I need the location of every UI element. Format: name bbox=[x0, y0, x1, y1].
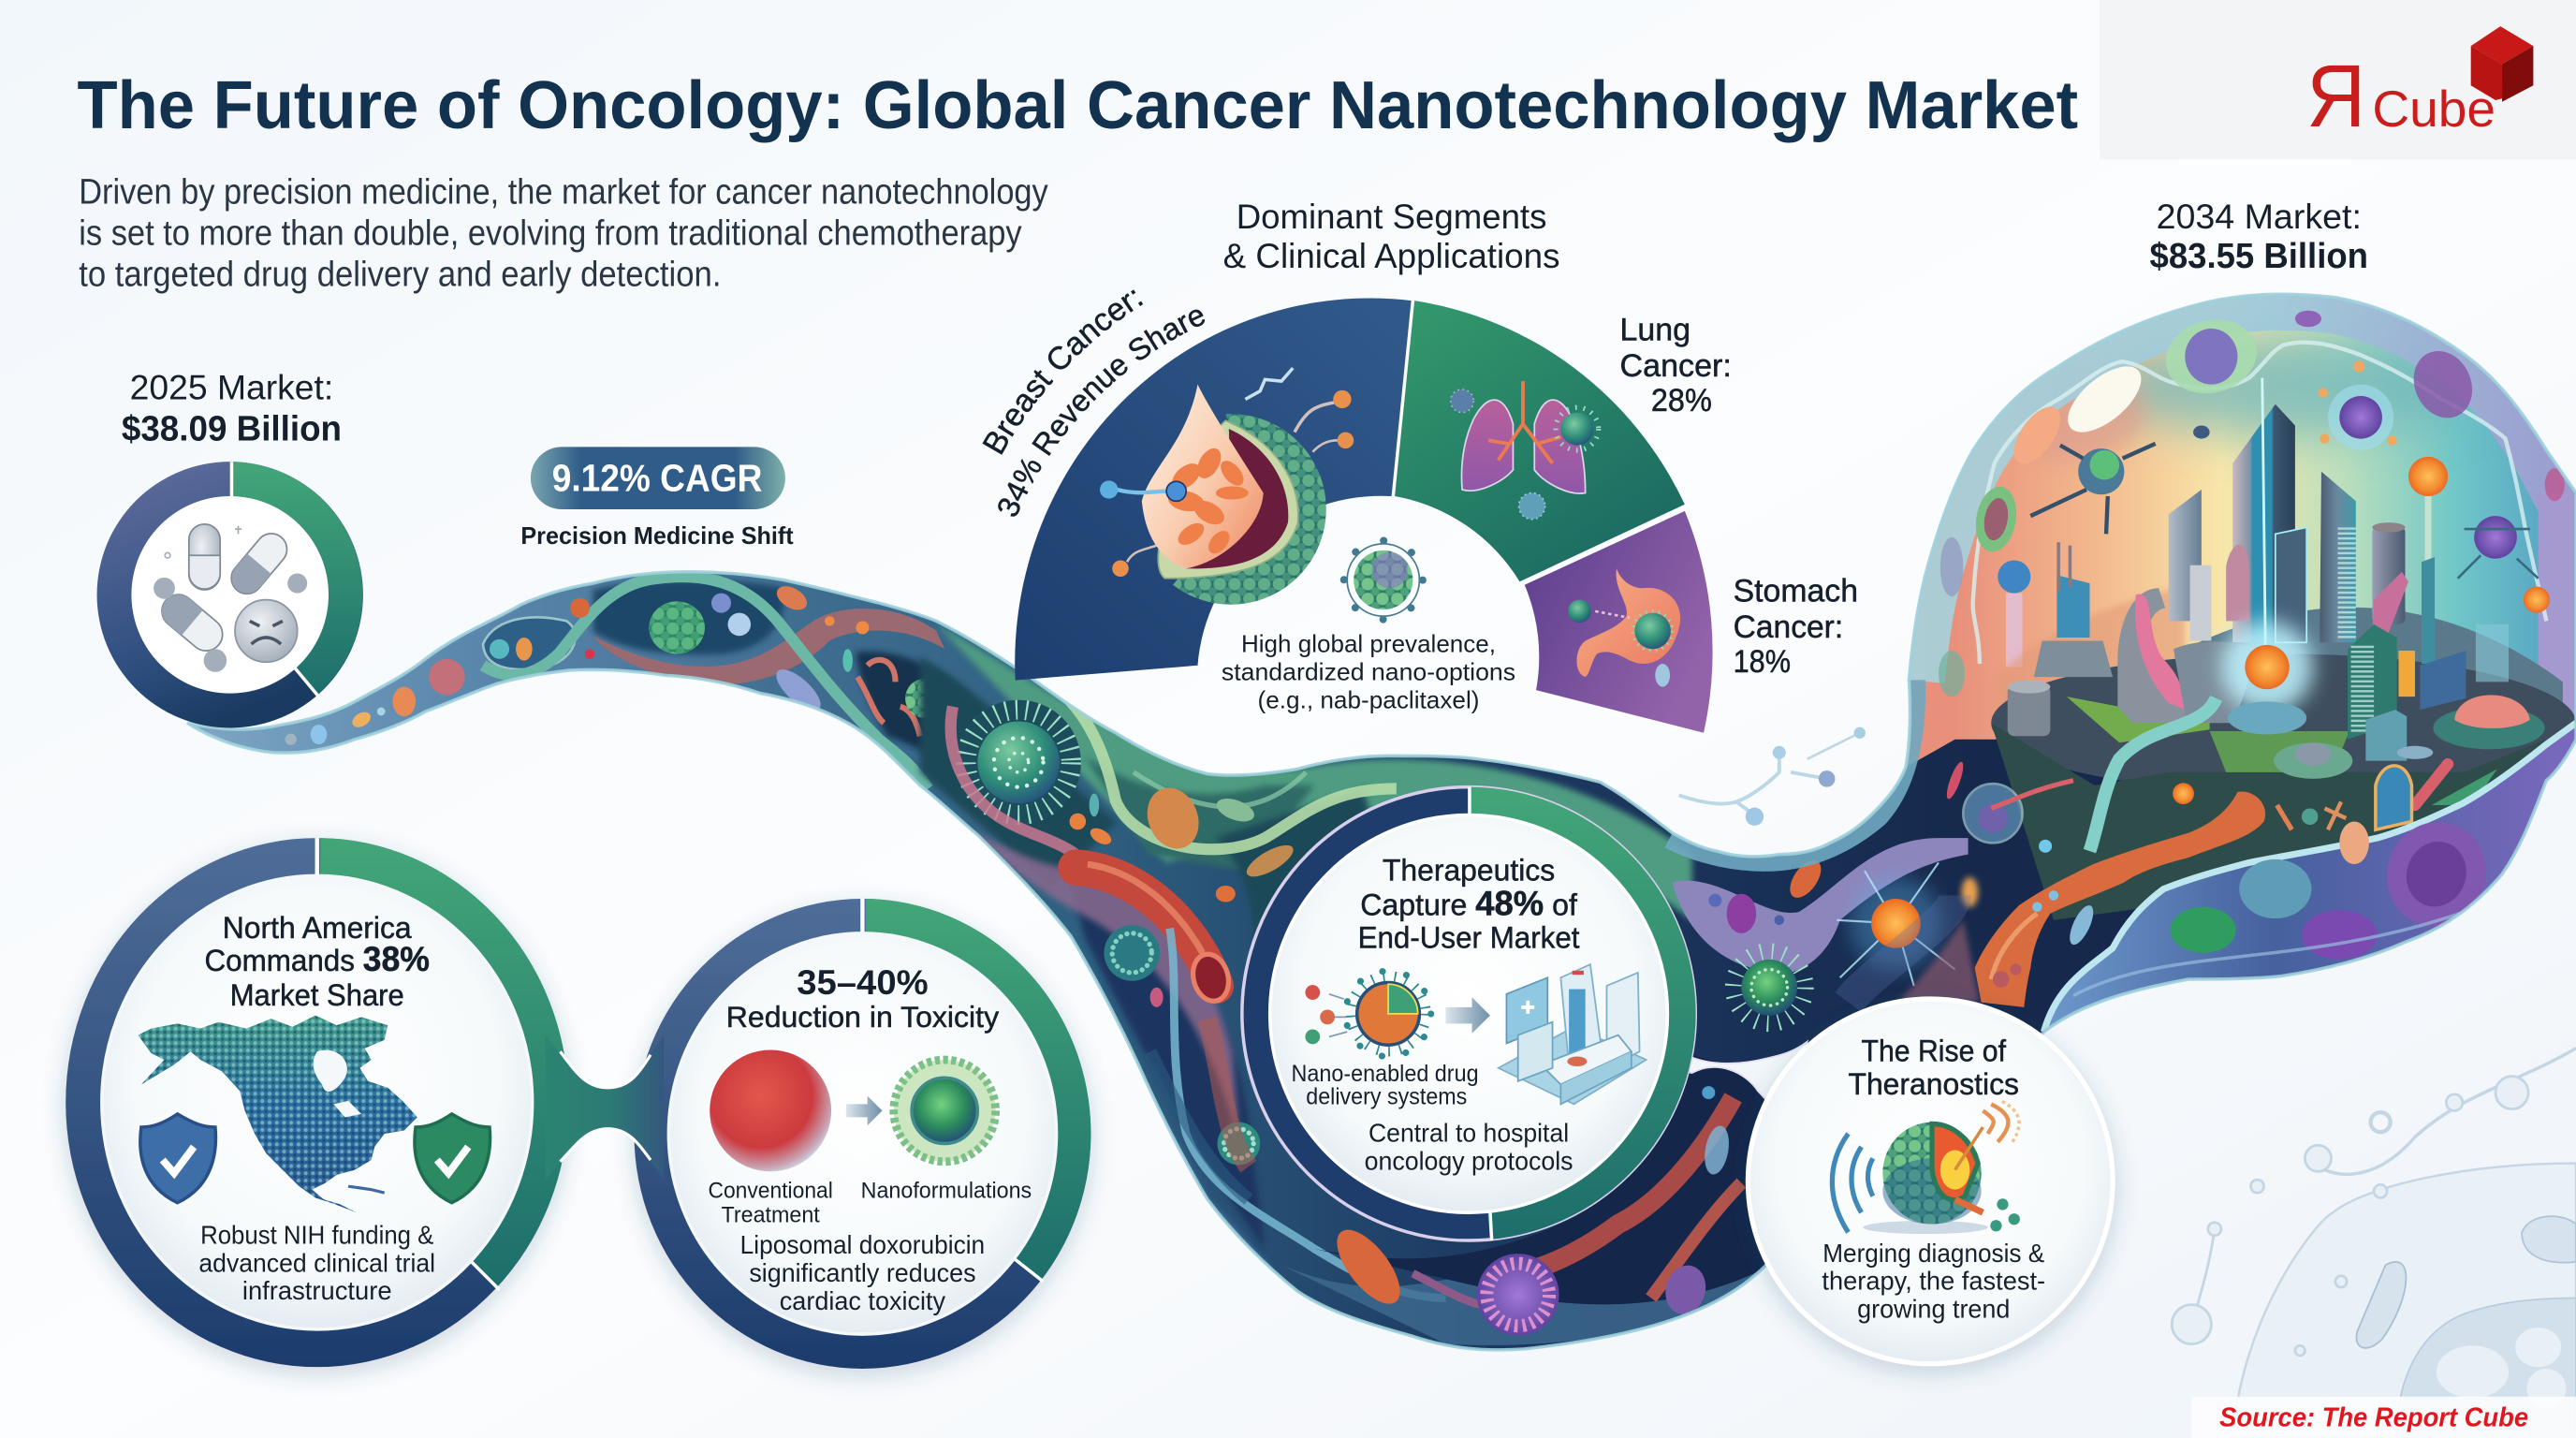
icon: nano drug particle bbox=[1305, 971, 1431, 1056]
icon: hospital room bbox=[1499, 964, 1647, 1104]
icon: arrow bbox=[846, 1096, 882, 1125]
label: stomach cancer: 18% bbox=[1734, 644, 1791, 680]
central description: standardized nano-options bbox=[1222, 658, 1515, 686]
heading: Therapeutics bbox=[1383, 854, 1555, 888]
caption: precision medicine shift: Precision Medicine Shift bbox=[520, 523, 794, 550]
segments heading: Dominant Segments bbox=[1237, 198, 1546, 236]
lobe: lower purple band bbox=[2048, 728, 2576, 1028]
subtitle text block: to targeted drug delivery and early detection. bbox=[79, 254, 721, 293]
subtitle text block: is set to more than double, evolving from traditional chemotherapy bbox=[79, 213, 1022, 252]
membrane band bbox=[1909, 294, 2576, 681]
label: lung cancer: 28% bbox=[1651, 383, 1712, 418]
panel: therapeutics: oncology protocols bbox=[1365, 1147, 1573, 1176]
2025 market label: $38.09 Billion bbox=[122, 408, 342, 448]
panel: therapeutics bbox=[1242, 787, 1696, 1240]
white bridge between therapeutics and theranostics bbox=[1667, 1042, 1808, 1117]
connector between lower circles bbox=[546, 1035, 664, 1180]
description: therapy, the fastest- bbox=[1822, 1267, 2045, 1296]
faint background cell, bottom right bbox=[2172, 1049, 2576, 1438]
labels: Treatment bbox=[721, 1203, 820, 1228]
heading: The Rise of bbox=[1862, 1034, 2007, 1068]
fan chart: dominant segments bbox=[1015, 299, 1713, 733]
label: breast cancer: Breast Cancer: bbox=[983, 289, 1144, 455]
heading: Reduction in Toxicity bbox=[726, 1000, 999, 1034]
panel: theranostics bbox=[1748, 999, 2113, 1364]
icon: central nanoparticle bbox=[1344, 540, 1423, 620]
description: cardiac toxicity bbox=[780, 1286, 945, 1315]
teal road bbox=[2089, 698, 2217, 851]
big bubble sky bbox=[1906, 294, 2576, 768]
icon: red sphere bbox=[710, 1049, 831, 1171]
upper S detail bbox=[285, 577, 986, 788]
icon: arrow bbox=[1445, 997, 1490, 1034]
labels: Nano-enabled drug bbox=[1292, 1062, 1479, 1087]
description: Merging diagnosis & bbox=[1822, 1239, 2045, 1268]
logo: RCube: Я bbox=[2306, 47, 2365, 146]
segment: breast cancer 34% bbox=[1015, 299, 1412, 681]
subtitle text block: Driven by precision medicine, the market for cancer nanotechnology bbox=[79, 172, 1048, 212]
heading: Commands 38% bbox=[205, 940, 430, 978]
heading: Market Share bbox=[230, 978, 404, 1012]
description: Robust NIH funding & bbox=[200, 1221, 434, 1250]
drifting particles above ribbon bbox=[1679, 727, 1866, 826]
labels bbox=[708, 1178, 1032, 1228]
orange arm bbox=[1975, 791, 2265, 1007]
heading: Theranostics bbox=[1848, 1067, 2019, 1101]
icon: theranostic particle bbox=[1832, 1101, 2020, 1234]
2034 market label bbox=[2150, 198, 2368, 275]
heading bbox=[1848, 1034, 2019, 1101]
segments heading bbox=[1223, 198, 1559, 275]
cells in bubble bbox=[1939, 310, 2565, 697]
label: stomach cancer: Stomach bbox=[1734, 573, 1858, 609]
subtitle text block bbox=[79, 172, 1048, 293]
panel: North America bbox=[66, 838, 568, 1367]
label: stomach cancer: Cancer: bbox=[1734, 609, 1843, 645]
2034 market label: $83.55 Billion bbox=[2150, 236, 2368, 275]
skyscrapers bbox=[2232, 404, 2295, 642]
description: growing trend bbox=[1857, 1295, 2010, 1324]
central description: (e.g., nab-paclitaxel) bbox=[1258, 685, 1479, 713]
heading: North America bbox=[223, 911, 413, 945]
logo: RCube bbox=[2306, 26, 2533, 146]
2025 market label: 2025 Market: bbox=[130, 368, 333, 406]
segment: stomach cancer 18% bbox=[1525, 511, 1713, 733]
heading bbox=[726, 963, 999, 1034]
segments heading: & Clinical Applications bbox=[1223, 237, 1559, 275]
central description: High global prevalence, bbox=[1241, 630, 1496, 658]
labels: Conventional bbox=[708, 1178, 833, 1203]
description: advanced clinical trial bbox=[198, 1248, 435, 1277]
label: lung cancer: Lung bbox=[1620, 312, 1690, 347]
heading: Capture 48% of bbox=[1360, 885, 1578, 923]
labels bbox=[1292, 1062, 1479, 1109]
description bbox=[198, 1221, 435, 1305]
logo backdrop bbox=[2100, 0, 2576, 159]
label: breast cancer: 34% Revenue Share bbox=[998, 309, 1206, 517]
heading bbox=[1358, 854, 1580, 955]
ground cells bbox=[2173, 764, 2497, 829]
source credit: Source: The Report Cube bbox=[2219, 1402, 2528, 1432]
central description bbox=[1222, 630, 1515, 713]
source credit bbox=[2191, 1397, 2576, 1438]
icon: blue shield bbox=[140, 1114, 215, 1203]
CAGR pill: 9.12% CAGR bbox=[552, 457, 762, 500]
labels: delivery systems bbox=[1306, 1084, 1467, 1109]
2034 market label: 2034 Market: bbox=[2157, 198, 2362, 236]
strands around virus bbox=[945, 706, 1078, 854]
middle washes bbox=[936, 624, 1692, 920]
labels: Nanoformulations bbox=[861, 1178, 1032, 1203]
label: lung cancer bbox=[1620, 312, 1732, 418]
description: infrastructure bbox=[242, 1276, 392, 1305]
label: stomach cancer bbox=[1734, 573, 1858, 680]
city bbox=[1991, 378, 2576, 920]
description bbox=[740, 1230, 985, 1315]
donut: 2025 market with pills bbox=[97, 462, 363, 727]
heading: End-User Market bbox=[1358, 921, 1580, 955]
panel: therapeutics: Central to hospital bbox=[1368, 1119, 1569, 1148]
heading bbox=[205, 911, 430, 1012]
map of North America bbox=[138, 1016, 417, 1212]
description bbox=[1822, 1239, 2045, 1324]
2025 market label bbox=[122, 368, 342, 448]
city beacon bbox=[2221, 621, 2313, 713]
heading: 35–40% bbox=[797, 963, 929, 1002]
description: significantly reduces bbox=[749, 1258, 976, 1287]
segment: lung cancer 28% bbox=[1395, 301, 1685, 581]
right dark zone bbox=[1673, 838, 1980, 1023]
nano drone bbox=[2030, 426, 2210, 534]
logo: RCube: Cube bbox=[2372, 81, 2496, 138]
panel: reduction in toxicity bbox=[634, 899, 1090, 1369]
lower bay bbox=[1284, 1266, 1756, 1345]
CAGR pill bbox=[531, 447, 785, 509]
cell: large green virus bbox=[956, 700, 1081, 825]
label: lung cancer: Cancer: bbox=[1620, 348, 1732, 384]
icon: green nanoformulation bbox=[894, 1060, 996, 1162]
icon: capsules and sad face bbox=[154, 524, 307, 672]
description: Liposomal doxorubicin bbox=[740, 1230, 985, 1259]
title: The Future of Oncology: Global Cancer Nanotechnology Market bbox=[77, 68, 2078, 143]
flowing cellular ribbon bbox=[187, 294, 2576, 1350]
red vessel bbox=[1076, 864, 1237, 1008]
ground bbox=[1991, 723, 2576, 920]
icon: green shield bbox=[415, 1114, 490, 1203]
